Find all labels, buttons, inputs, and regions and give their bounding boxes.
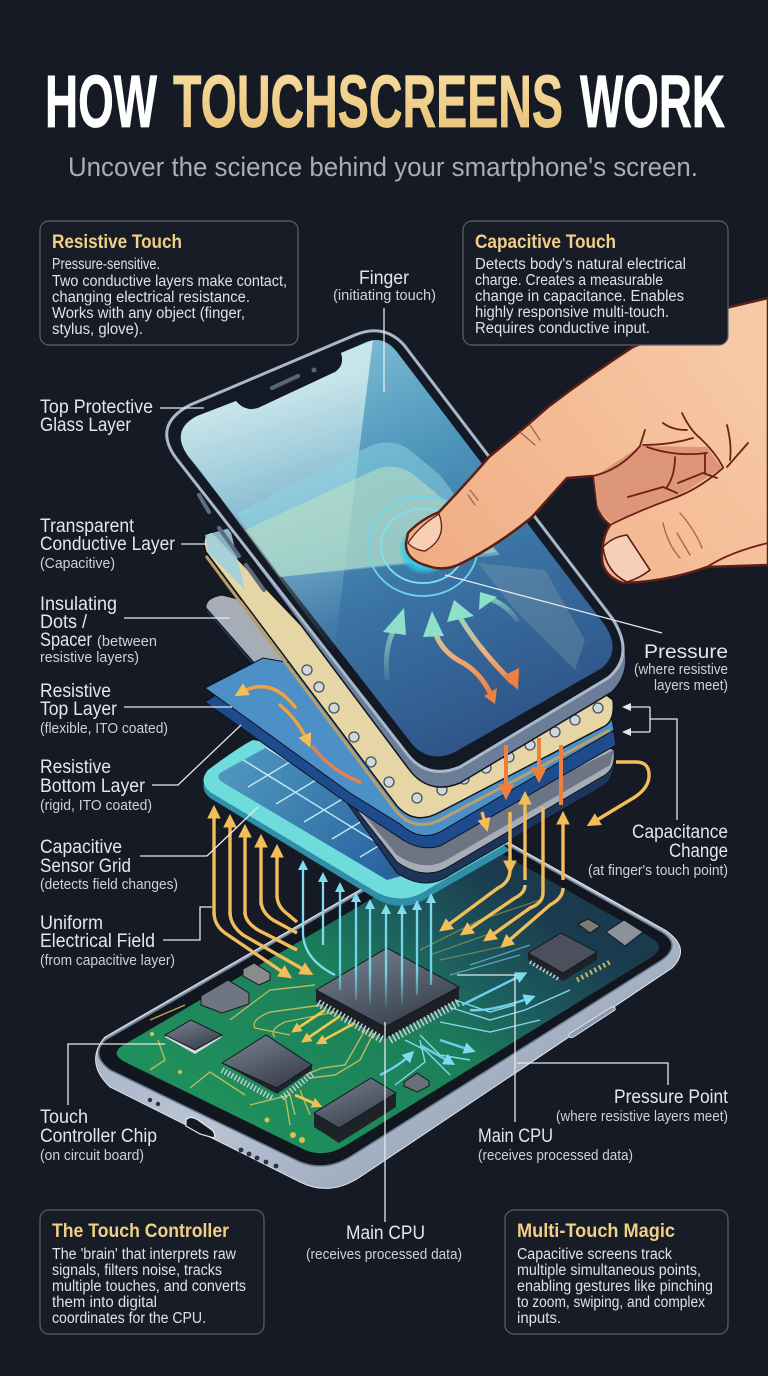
callout: The Touch Controller: The 'brain' that interprets raw [52, 1246, 237, 1263]
callout: Capacitive Touch: Detects body's natural electrical [475, 256, 686, 273]
label: Main CPU bottom: Main CPU [346, 1223, 425, 1244]
callout: Multi-Touch Magic: multiple simultaneous points, [517, 1262, 701, 1279]
label: Top Protective Glass Layer [40, 397, 204, 436]
callout: Resistive Touch [40, 221, 298, 345]
hand touching the screen [406, 298, 768, 583]
label: Capacitive Sensor Grid: (detects field changes) [40, 877, 178, 893]
label: Pressure Point: Pressure Point [614, 1087, 729, 1108]
curled finger shading [594, 446, 722, 523]
callout: The Touch Controller: multiple touches, and converts [52, 1278, 246, 1295]
callout: The Touch Controller: them into digital [52, 1294, 157, 1311]
label: Transparent Conductive Layer: Conductive Layer [40, 534, 176, 555]
label: Finger: Finger [359, 268, 410, 289]
callout: Capacitive Touch: charge. Creates a measurable [475, 272, 663, 289]
callout: Multi-Touch Magic [505, 1210, 728, 1334]
thumb nail [603, 535, 650, 582]
label: Insulating Dots / Spacer: Insulating [40, 594, 117, 615]
callout: Multi-Touch Magic: to zoom, swiping, and complex [517, 1294, 705, 1311]
label: Uniform Electrical Field: (from capacitive layer) [40, 953, 175, 969]
callout: The Touch Controller: coordinates for the CPU. [52, 1310, 206, 1327]
top phone [167, 331, 626, 787]
label: Main CPU bottom [306, 1022, 462, 1263]
label: Resistive Bottom Layer: Bottom Layer [40, 776, 146, 797]
cyan arrowheads [298, 860, 436, 914]
callout: Capacitive Touch: highly responsive multi-touch. [475, 304, 669, 321]
label: Transparent Conductive Layer: (Capacitive) [40, 556, 115, 572]
title: HOW [45, 60, 157, 143]
callout: Resistive Touch: Works with any object (finger, [52, 305, 245, 322]
label: Finger [333, 268, 436, 392]
label: Pressure: (where resistive [634, 662, 728, 678]
callout: Resistive Touch: Two conductive layers make contact, [52, 273, 287, 290]
callout: Multi-Touch Magic: inputs. [517, 1310, 561, 1327]
label: Resistive Bottom Layer [40, 725, 241, 814]
cyan field arrows [303, 868, 431, 1010]
label: Insulating Dots / Spacer: (between [97, 634, 157, 650]
current arrows on blue layer [240, 687, 360, 782]
label: Top Protective Glass Layer: Top Protective [40, 397, 153, 418]
label: Capacitive Sensor Grid [40, 807, 258, 893]
label: Capacitance Change: (at finger's touch point) [588, 863, 728, 879]
label: Transparent Conductive Layer: Transparent [40, 516, 135, 537]
speaker and camera [272, 376, 298, 388]
orange signal arrows [506, 738, 561, 805]
label: Resistive Top Layer [40, 681, 232, 737]
callout: Resistive Touch: Resistive Touch [52, 231, 182, 253]
callout: Multi-Touch Magic: Multi-Touch Magic [517, 1220, 675, 1242]
ports [148, 1098, 278, 1168]
label: Pressure: layers meet) [654, 678, 728, 694]
icon: right chip [528, 933, 597, 981]
callout: Resistive Touch: changing electrical resistance. [52, 289, 250, 306]
label: Resistive Bottom Layer: (rigid, ITO coated) [40, 798, 152, 814]
layer: resistive top and bottom blue [205, 658, 616, 848]
label: Main CPU right: (receives processed data) [478, 1148, 633, 1164]
small pads [577, 962, 610, 980]
side buttons [199, 495, 264, 590]
label: Top Protective Glass Layer: Glass Layer [40, 415, 132, 436]
callout: Resistive Touch: Pressure-sensitive. [52, 256, 160, 273]
label: Pressure [445, 575, 728, 694]
callout: The Touch Controller [40, 1210, 264, 1334]
callout: The Touch Controller: signals, filters noise, tracks [52, 1262, 222, 1279]
label: Resistive Top Layer: Top Layer [40, 699, 118, 720]
label: Main CPU bottom: (receives processed data) [306, 1247, 462, 1263]
icon: small chips [201, 919, 643, 1092]
icon: long block chip [314, 1078, 396, 1143]
fingernail [408, 514, 442, 551]
layer: capacitive sensor grid [204, 740, 508, 906]
layer: cream conductive with spacer dots [204, 528, 613, 824]
label: Touch Controller Chip [40, 1044, 165, 1164]
layer: insulating grey spacer [206, 595, 614, 883]
label: Touch Controller Chip: Touch [40, 1107, 88, 1128]
label: Resistive Top Layer: Resistive [40, 681, 111, 702]
label: Transparent Conductive Layer [40, 516, 207, 572]
lower screen band [478, 563, 585, 670]
callout: Resistive Touch: stylus, glove). [52, 321, 143, 338]
label: Touch Controller Chip: (on circuit board) [40, 1148, 144, 1164]
label: Uniform Electrical Field: Uniform [40, 913, 103, 934]
screen reflection [181, 340, 373, 653]
screen [181, 340, 613, 756]
callout: Capacitive Touch: Capacitive Touch [475, 231, 616, 253]
label: Insulating Dots / Spacer [40, 594, 230, 666]
callout: Capacitive Touch: Requires conductive input. [475, 320, 650, 337]
callout: Multi-Touch Magic: enabling gestures like pinching [517, 1278, 713, 1295]
callout: Capacitive Touch [463, 221, 728, 345]
label: Insulating Dots / Spacer: Spacer [40, 630, 93, 651]
callout: The Touch Controller: The Touch Controller [52, 1220, 229, 1242]
touch ripple [368, 496, 478, 596]
subtitle: Uncover the science behind your smartphone's screen. [68, 152, 698, 182]
label: Capacitance Change: Change [669, 841, 728, 862]
label: Insulating Dots / Spacer: resistive layers) [40, 650, 139, 666]
label: Finger: (initiating touch) [333, 288, 436, 304]
amber signal arrows [214, 762, 649, 975]
circuit traces [150, 900, 540, 1125]
icon: memory chip [222, 1035, 312, 1098]
label: Pressure Point [517, 1063, 729, 1125]
label: Main CPU right: Main CPU [478, 1126, 553, 1147]
thumb wrinkles [468, 425, 702, 558]
label: Pressure Point: (where resistive layers meet) [556, 1109, 728, 1125]
cyan data arrows on board [380, 975, 530, 1075]
screen arrows [386, 598, 517, 695]
label: Insulating Dots / Spacer: Dots / [40, 612, 88, 633]
icon: touch controller chip [165, 1020, 222, 1054]
callout: Capacitive Touch: change in capacitance. Enables [475, 288, 684, 305]
label: Capacitance Change [588, 703, 728, 879]
icon: main CPU [316, 948, 459, 1040]
label: Resistive Top Layer: (flexible, ITO coated) [40, 721, 168, 737]
label: Capacitive Sensor Grid: Capacitive [40, 837, 122, 858]
label: Resistive Bottom Layer: Resistive [40, 757, 111, 778]
knuckle creases [593, 413, 768, 567]
label: Main CPU right [457, 975, 633, 1164]
callout: Multi-Touch Magic: Capacitive screens track [517, 1246, 672, 1263]
label: Capacitive Sensor Grid: Sensor Grid [40, 856, 131, 877]
label: Uniform Electrical Field [40, 907, 212, 969]
spacer dots [302, 665, 603, 803]
label: Touch Controller Chip: Controller Chip [40, 1126, 157, 1147]
label: Capacitance Change: Capacitance [632, 822, 728, 843]
yellow data arrows on board [295, 1010, 355, 1105]
bottom phone with circuit board [96, 828, 681, 1188]
label: Pressure: Pressure [644, 642, 728, 663]
label: Uniform Electrical Field: Electrical Field [40, 931, 155, 952]
